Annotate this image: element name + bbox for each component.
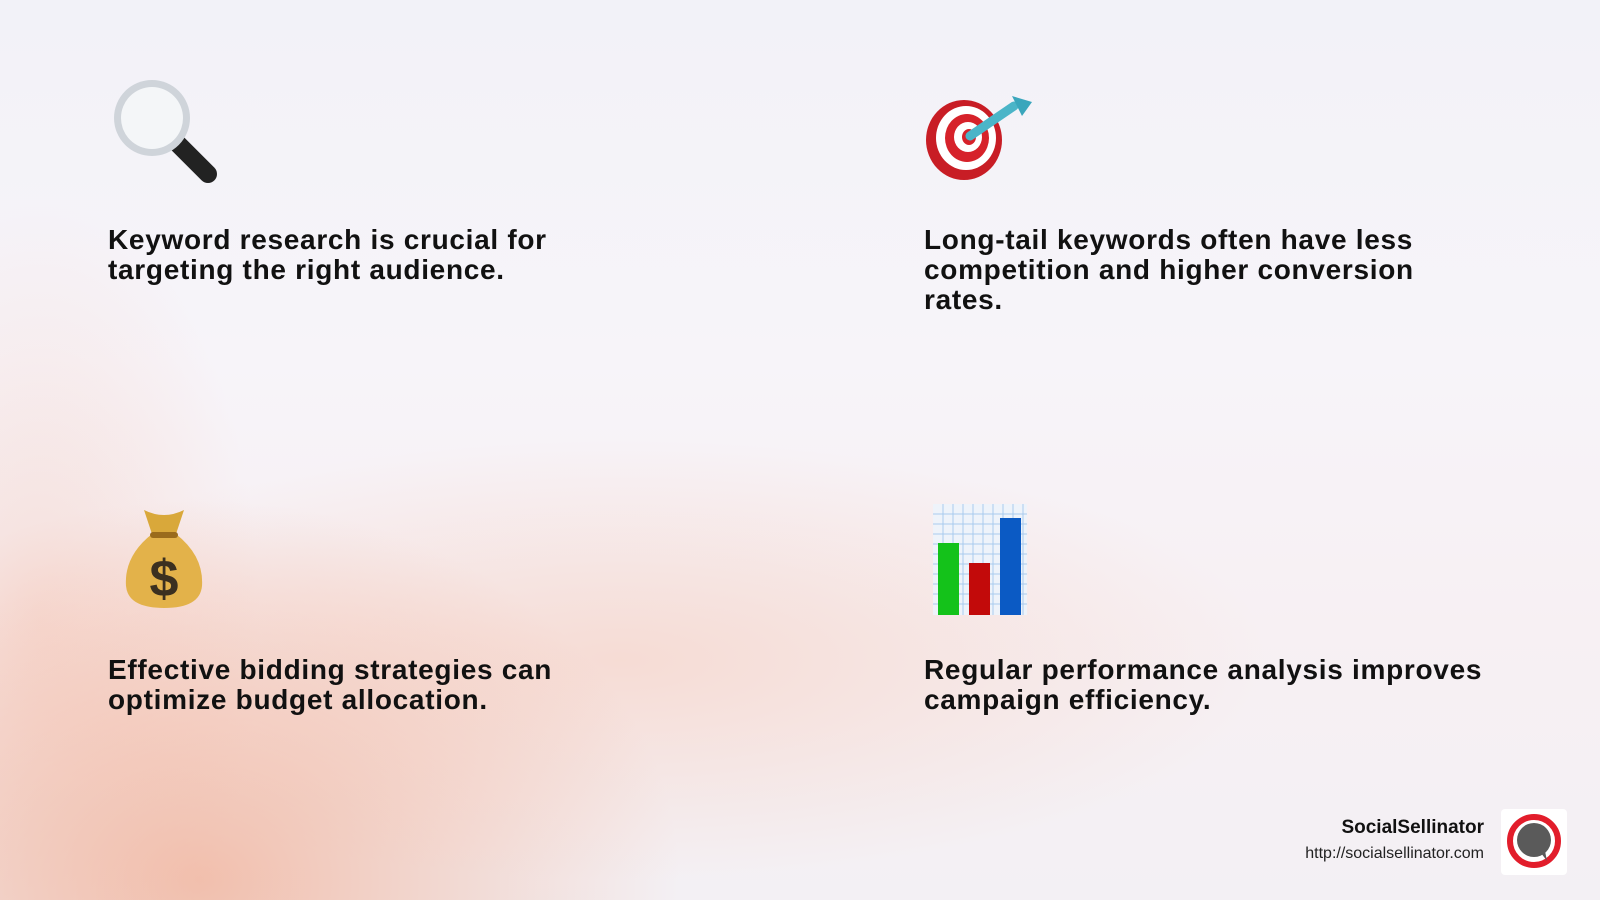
text: long-tail keywords: rates. [924, 284, 1003, 315]
brand url: http://socialsellinator.com [1305, 845, 1484, 862]
text: keyword research: targeting the right audience. [108, 254, 505, 285]
logo [1501, 809, 1567, 875]
text: bidding strategies [108, 654, 552, 715]
text: long-tail keywords [924, 224, 1414, 315]
icon: bar chart [933, 504, 1027, 615]
text: keyword research [108, 224, 547, 285]
text: long-tail keywords: Long-tail keywords often have less [924, 224, 1413, 255]
icon: money bag [126, 510, 202, 608]
text: performance analysis [924, 654, 1482, 715]
icon: money bag: $ [150, 550, 179, 608]
text: keyword research: Keyword research is crucial for [108, 224, 547, 255]
icon: magnifying glass [114, 80, 217, 183]
text: bidding strategies: Effective bidding strategies can [108, 654, 552, 685]
brand block [1305, 809, 1567, 875]
text: performance analysis: Regular performance analysis improves [924, 654, 1482, 685]
text: performance analysis: campaign efficiency. [924, 684, 1211, 715]
brand name: SocialSellinator [1341, 817, 1484, 838]
text: bidding strategies: optimize budget allocation. [108, 684, 488, 715]
text: long-tail keywords: competition and higher conversion [924, 254, 1414, 285]
icon: target [926, 96, 1032, 180]
